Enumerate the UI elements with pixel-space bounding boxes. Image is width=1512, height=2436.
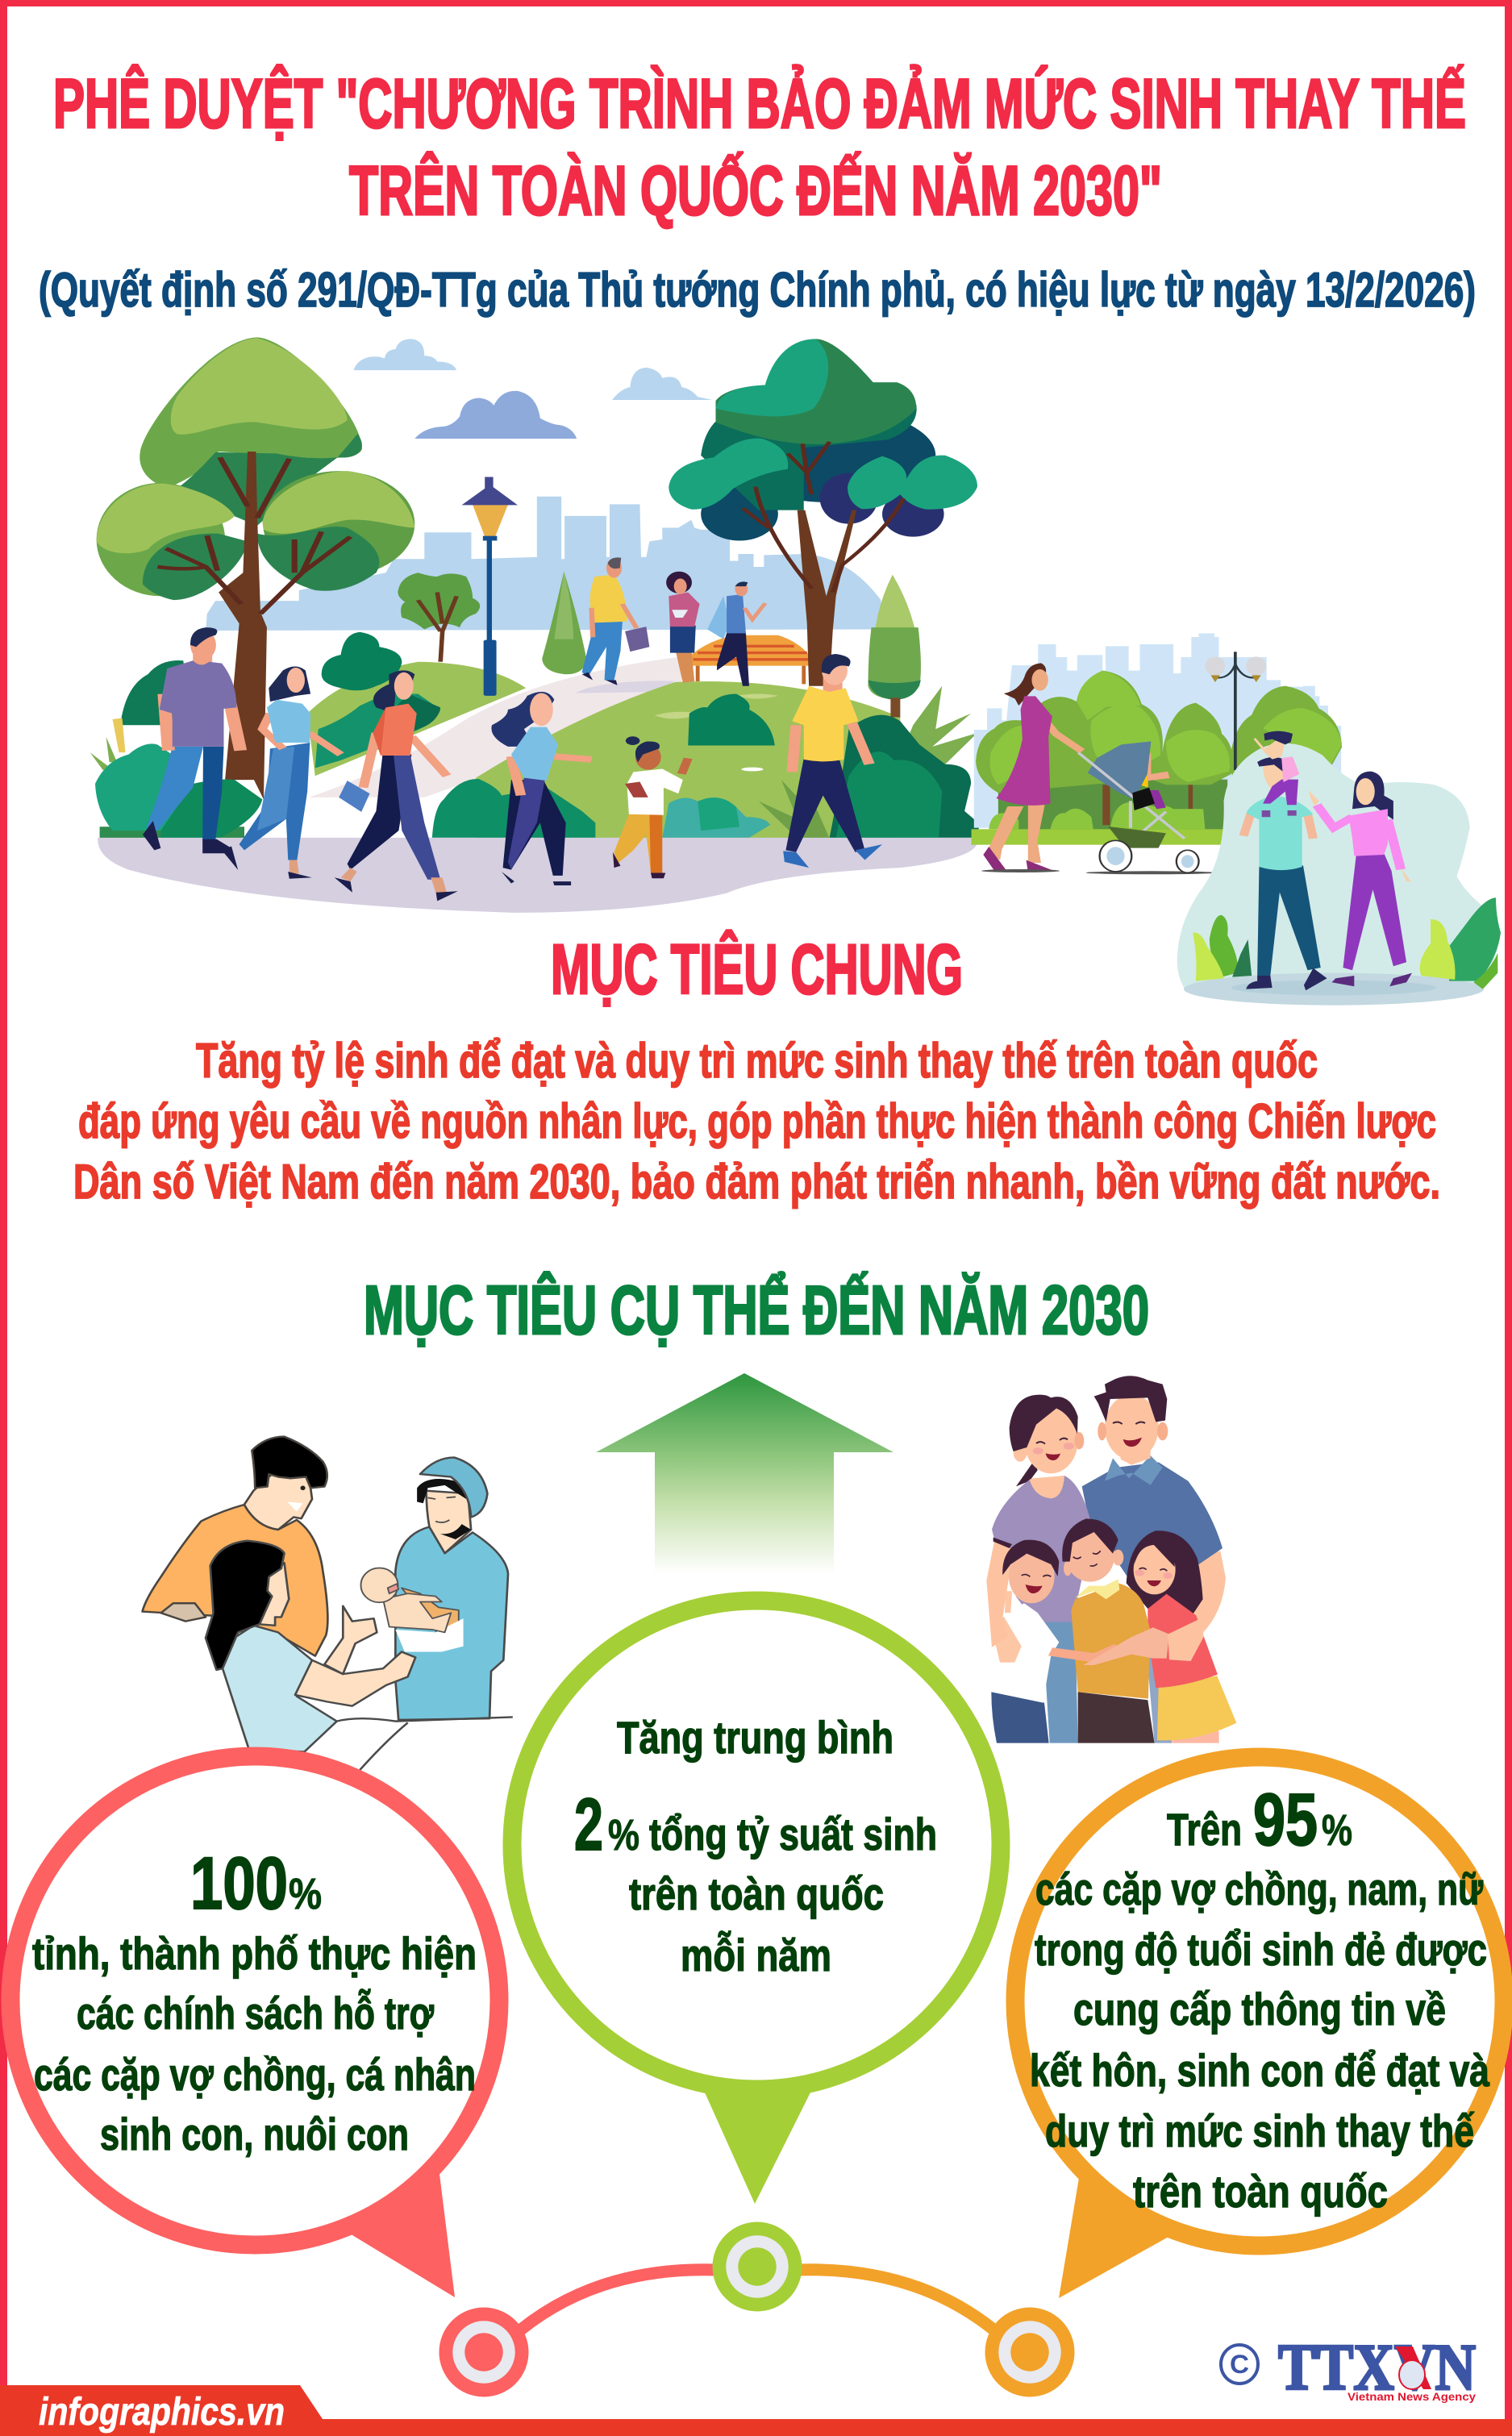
TTXVN logo	[1221, 2330, 1476, 2404]
grass strip	[972, 829, 1229, 845]
bubble text: các chính sách hỗ trợ	[77, 1988, 434, 2038]
bubble: over 95% couples informed	[1015, 1757, 1504, 2298]
stroller	[1078, 741, 1216, 874]
boy with yellow shirt	[1048, 1518, 1204, 1743]
small tree	[398, 573, 480, 662]
TTXVN logo: Vietnam News Agency	[1347, 2390, 1476, 2403]
title	[53, 65, 1466, 230]
hills and footpath	[307, 662, 526, 776]
bubble text: các cặp vợ chồng, cá nhân	[34, 2049, 476, 2100]
ground	[1184, 973, 1484, 1006]
boy with white shirt	[990, 1540, 1059, 1743]
lamp post	[462, 477, 518, 696]
bubble text: Trên	[1167, 1804, 1242, 1855]
bubble shape	[1015, 1757, 1504, 2298]
tree right	[669, 339, 977, 686]
street lamp	[1205, 652, 1266, 770]
bubble text	[574, 1712, 937, 1980]
bubble text: trên toàn quốc	[1133, 2166, 1388, 2217]
general objective text	[73, 1034, 1440, 1209]
woman in purple dress	[981, 663, 1082, 872]
newborn baby	[360, 1568, 464, 1652]
light skyline	[974, 633, 1341, 828]
man in yellow shirt	[783, 654, 882, 868]
bubble text: 95	[1253, 1779, 1318, 1861]
bench	[691, 635, 809, 684]
mother	[1308, 772, 1412, 986]
heading: specific targets: MỤC TIÊU CỤ THỂ ĐẾN NĂM 2030	[364, 1272, 1149, 1349]
tree left	[97, 337, 414, 799]
city skyline	[206, 497, 881, 631]
family background blob	[1177, 743, 1497, 989]
nurse	[395, 1457, 508, 1720]
timeline node: orange	[985, 2308, 1074, 2396]
girl	[1127, 1530, 1236, 1743]
park trees	[976, 671, 1342, 831]
illustration: happy family of five	[986, 1376, 1236, 1743]
clouds	[354, 339, 713, 439]
timeline node: green	[713, 2222, 802, 2311]
up arrow	[596, 1373, 893, 1574]
TTXVN logo: C	[1230, 2350, 1249, 2379]
bubble text: tỉnh, thành phố thực hiện	[32, 1928, 477, 1979]
illustration: woman with stroller and family	[972, 633, 1501, 1006]
bubble text: tổng tỷ suất sinh	[649, 1809, 937, 1859]
background people	[582, 557, 765, 686]
bubble shape	[512, 1601, 1001, 2204]
heading: general objective: MỤC TIÊU CHUNG	[551, 930, 963, 1009]
bubble text: sinh con, nuôi con	[100, 2109, 409, 2159]
walkway	[98, 838, 978, 913]
woman with long hair	[491, 692, 592, 885]
illustration: families walking in the park	[90, 337, 981, 913]
footer bar with site name: infographics.vn	[39, 2391, 285, 2434]
father and child	[1243, 731, 1327, 990]
footer bar with site name	[0, 2385, 1512, 2436]
big number: %	[289, 1870, 322, 1918]
bubble text: trên toàn quốc	[629, 1868, 884, 1919]
plants	[1193, 897, 1501, 989]
foreground bushes	[90, 632, 981, 839]
bubble text	[32, 1928, 477, 2159]
child	[613, 736, 688, 878]
illustration: parents and nurse with newborn	[143, 1437, 513, 1770]
man in purple shirt	[143, 627, 240, 870]
timeline node: red	[439, 2308, 529, 2396]
bubble text: Tăng trung bình	[617, 1712, 893, 1763]
bubble text: mỗi năm	[681, 1930, 831, 1980]
bubble text: %	[1322, 1806, 1352, 1855]
bubble shape	[10, 1756, 499, 2297]
TTXVN logo: TTXVN	[1278, 2330, 1476, 2404]
bubble: 2% fertility increase	[512, 1601, 1001, 2204]
title: TRÊN TOÀN QUỐC ĐẾN NĂM 2030"	[349, 152, 1162, 230]
bubble: 100% provinces	[10, 1756, 499, 2297]
woman in light blue shirt	[222, 667, 341, 879]
woman in orange shirt	[335, 670, 458, 901]
big number: 100	[190, 1843, 288, 1925]
father	[143, 1437, 327, 1656]
father	[1082, 1376, 1226, 1634]
bubble text: %	[608, 1811, 639, 1859]
conifers	[542, 572, 921, 718]
bubble text: 2	[574, 1784, 603, 1866]
mother	[206, 1541, 513, 1770]
timeline connector	[521, 2270, 993, 2330]
mother	[986, 1395, 1090, 1743]
bubble text	[1030, 1779, 1490, 2217]
